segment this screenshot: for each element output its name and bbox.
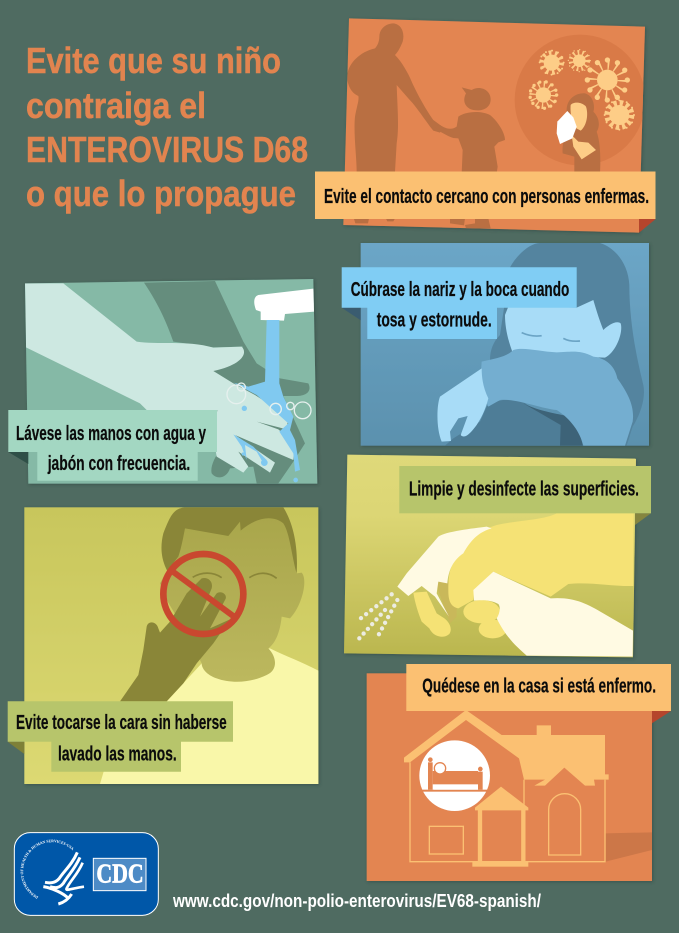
fold	[635, 513, 651, 525]
label	[406, 664, 671, 711]
panel: clean surfaces	[344, 455, 651, 657]
illustration: hand with spray bottle	[356, 513, 634, 657]
label: jabón con frecuencia.	[47, 453, 190, 475]
illustration: hands under faucet	[25, 281, 314, 483]
fold	[8, 452, 28, 464]
panel: wash hands	[8, 279, 317, 484]
fold	[652, 711, 671, 723]
illustration: child sneezing into elbow	[437, 243, 644, 446]
panel background	[344, 455, 636, 657]
fold	[639, 219, 656, 233]
panel background	[367, 673, 652, 881]
label: Lávese las manos con agua y	[16, 423, 207, 445]
illustration: adult, child and sick person	[347, 23, 645, 228]
label: Cúbrase la nariz y la boca cuando	[351, 279, 569, 301]
panel: stay home	[367, 664, 671, 881]
label	[8, 410, 217, 481]
panel background	[24, 507, 318, 784]
icon: HHS eagle	[43, 852, 84, 904]
label	[399, 466, 651, 513]
panel: cover nose and mouth	[342, 243, 649, 446]
title: ENTEROVIRUS D68	[26, 129, 308, 170]
fold	[8, 742, 24, 754]
label: Evite tocarse la cara sin haberse	[16, 712, 227, 734]
label	[8, 701, 233, 772]
label	[342, 267, 577, 339]
illustration: house with bed	[404, 710, 652, 867]
logo: HHS and CDC: DEPARTMENT OF HEALTH & HUMAN SERVICES·USA	[20, 840, 74, 899]
CDC logo: CDC	[96, 859, 144, 889]
panel: avoid close contact	[315, 18, 656, 233]
panel background	[361, 243, 649, 446]
label: tosa y estornude.	[377, 310, 492, 332]
website url: www.cdc.gov/non-polio-enterovirus/EV68-spanish/	[172, 890, 541, 911]
illustration: child touching face	[100, 507, 318, 784]
label	[315, 172, 656, 219]
title: contraiga el	[26, 85, 206, 126]
title	[26, 40, 308, 214]
HHS seal text	[23, 842, 75, 897]
panel background	[25, 279, 317, 484]
logo: HHS and CDC	[14, 832, 159, 916]
fold	[342, 308, 361, 320]
panel: avoid touching face	[8, 507, 318, 784]
label: lavado las manos.	[58, 744, 177, 766]
title: Evite que su niño	[26, 40, 281, 81]
title: o que lo propague	[26, 173, 296, 214]
panel background	[343, 18, 645, 233]
